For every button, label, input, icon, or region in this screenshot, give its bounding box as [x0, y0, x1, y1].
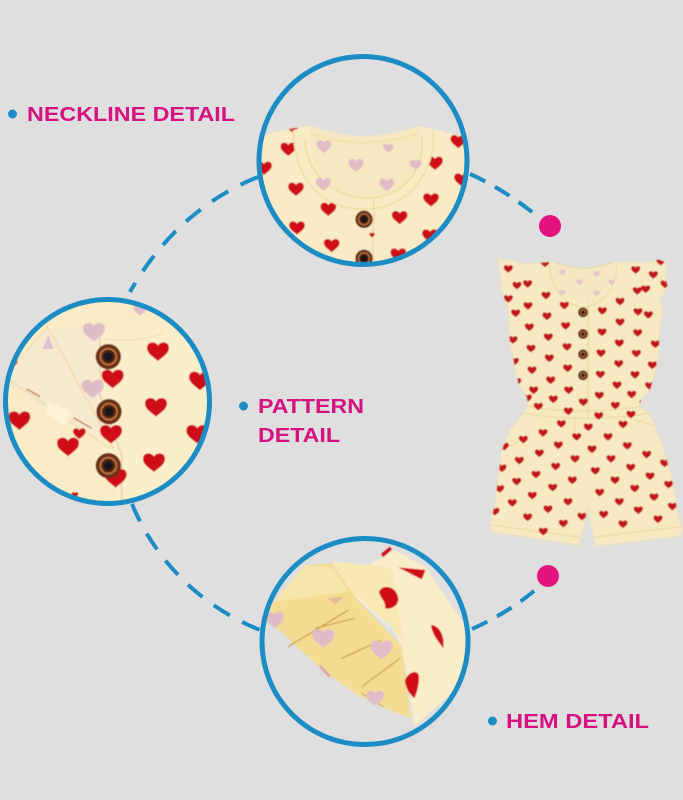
romper body [490, 258, 682, 546]
circle: hem detail [262, 538, 468, 744]
label: pattern detail: PATTERN [258, 396, 364, 418]
romper hearts [490, 258, 677, 536]
label: pattern detail [239, 396, 364, 447]
dashed connector: hem to product [472, 586, 540, 629]
buttons [578, 307, 588, 380]
label: neckline detail: NECKLINE DETAIL [27, 104, 235, 126]
dashed connector: pattern to hem [132, 504, 260, 630]
dashed connector: neckline to pattern [130, 177, 258, 292]
neck opening [553, 262, 613, 302]
dashed connector: neckline to product [470, 174, 537, 216]
pink dot top [539, 215, 561, 237]
circle: neckline detail [256, 56, 470, 270]
circle: pattern detail [0, 295, 220, 510]
romper product photo [490, 258, 682, 546]
label: hem detail: HEM DETAIL [506, 711, 649, 733]
pink dot bottom [537, 565, 559, 587]
waist, cuffs, placket [492, 302, 682, 537]
label: pattern detail: DETAIL [258, 425, 340, 447]
neckline pink hearts [559, 269, 615, 296]
